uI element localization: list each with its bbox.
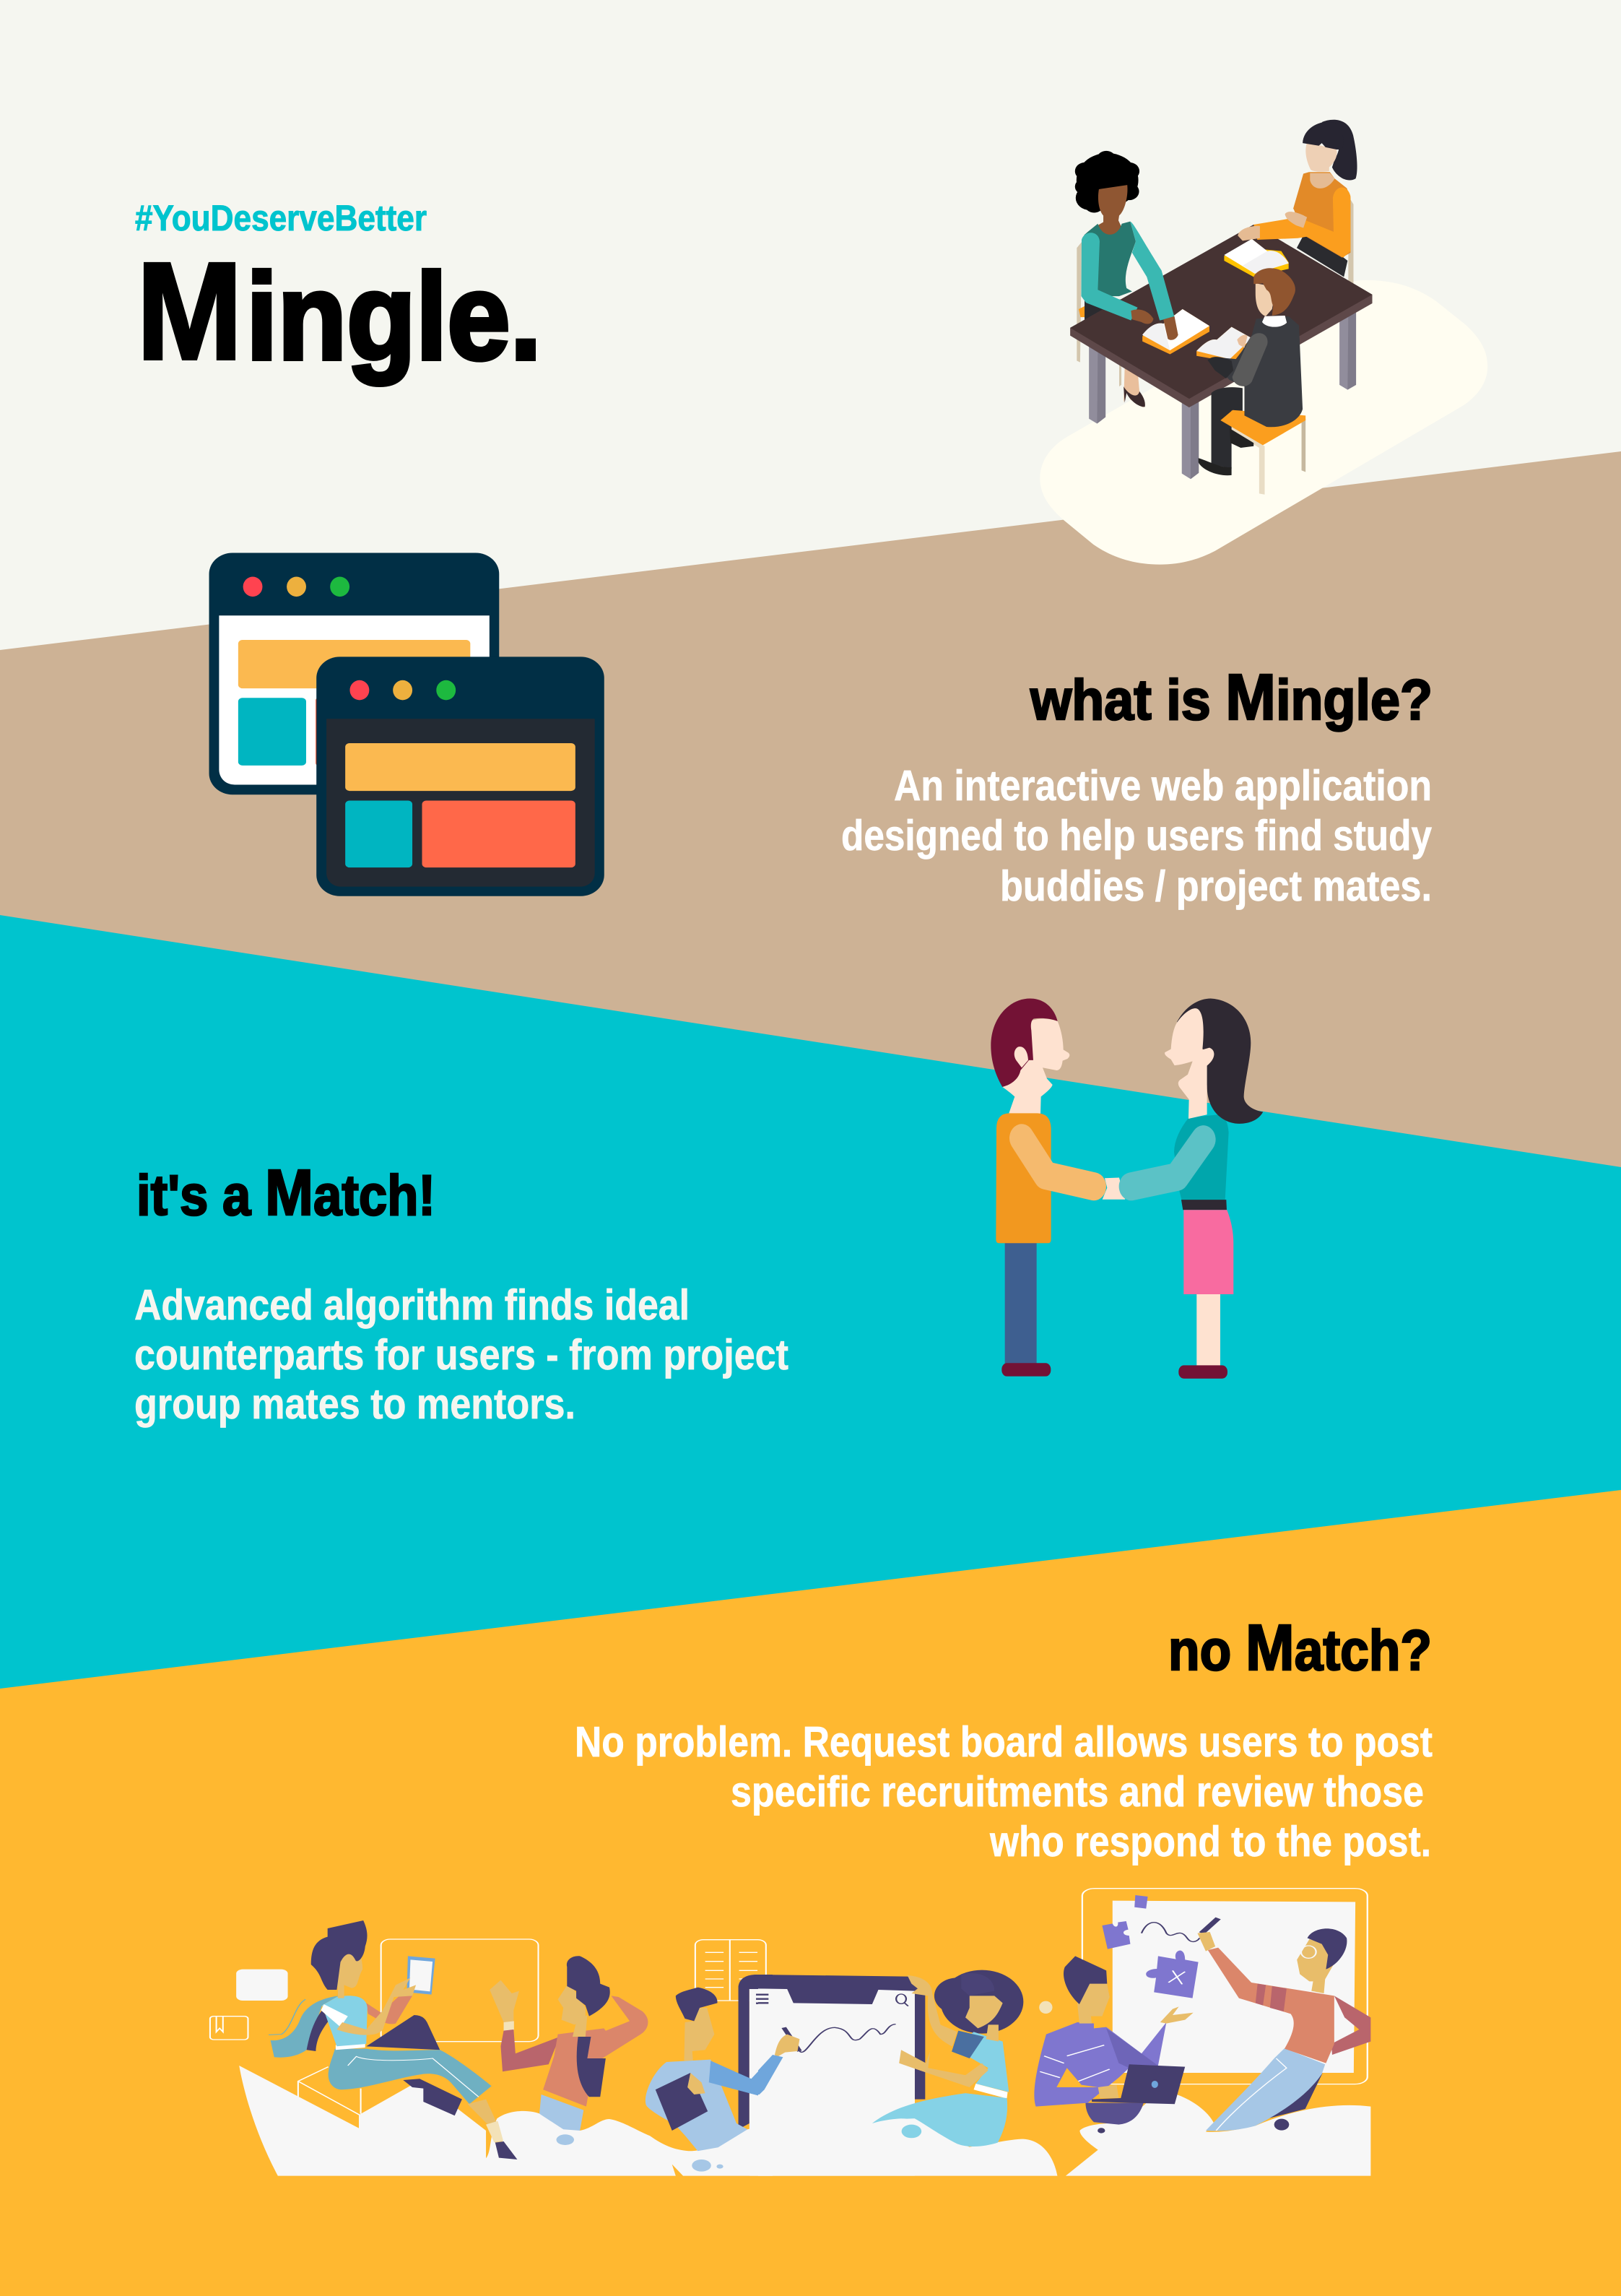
person: woman in blue dress: [872, 1970, 1023, 2146]
puzzle pieces: [1102, 1895, 1199, 1998]
small blue droplets: [557, 2134, 723, 2172]
illustration: two people shaking hands: [991, 999, 1263, 1379]
person: man with backpack: [490, 1956, 648, 2131]
hashtag: #YouDeserveBetter: [135, 198, 427, 238]
text block: no Match: [575, 1718, 1433, 1866]
panel: it's a Match background: [0, 915, 1621, 1733]
back browser window: [209, 553, 499, 794]
text block: it's a Match: counterparts for users - from project: [134, 1331, 788, 1379]
text block: no Match: specific recruitments and review those: [731, 1768, 1424, 1816]
highlight blob: [1040, 280, 1487, 565]
phone with screen: [758, 1975, 925, 2176]
woman: [1131, 999, 1263, 1379]
man: [991, 999, 1094, 1377]
background outlines: [210, 1939, 766, 2128]
panel: no Match background: [0, 1490, 1621, 2296]
droplet on ground: [902, 2125, 921, 2138]
chat bubble: [236, 1970, 288, 2001]
illustration: team collaborating, right half: [758, 1889, 1370, 2176]
text block: what is Mingle: [841, 762, 1432, 910]
white ground: [758, 2094, 1370, 2176]
heading: what is Mingle: what is Mingle?: [1030, 662, 1433, 734]
text block: it's a Match: [134, 1281, 788, 1428]
text block: it's a Match: group mates to mentors.: [134, 1380, 575, 1428]
person: man with tablet: [269, 1920, 517, 2159]
whiteboard squiggle and pen: [1142, 1923, 1199, 1941]
panel: what is Mingle background: [0, 451, 1621, 1228]
text block: what is Mingle: buddies / project mates.: [1000, 862, 1432, 910]
person: man from behind: [1199, 268, 1305, 495]
person: woman with ponytail, body: [1293, 120, 1357, 283]
title: M: [136, 233, 243, 389]
text block: it's a Match: Advanced algorithm finds ideal: [134, 1281, 690, 1329]
heading: no Match: no Match?: [1168, 1612, 1432, 1684]
dress skirt overlap: [872, 2093, 1007, 2146]
illustration: two browser windows: [209, 553, 604, 896]
title: ingle.: [246, 248, 542, 386]
white ground: [239, 2066, 773, 2176]
front browser window: [316, 657, 604, 896]
illustration: three people studying at a table: [1040, 120, 1487, 565]
clasped hands: [1103, 1178, 1125, 1200]
heading: it's a Match: it's a Match!: [136, 1157, 435, 1229]
open books on table: [1142, 239, 1289, 363]
whiteboard: [1082, 1889, 1368, 2084]
puzzle cross: [1168, 1970, 1185, 1984]
table legs: [1089, 345, 1105, 423]
table top: [1070, 225, 1373, 407]
table: [1070, 225, 1373, 479]
person: woman with curly hair, body: [1075, 151, 1145, 407]
text block: no Match: No problem. Request board allows users to post: [575, 1718, 1433, 1766]
person: man with laptop: [1034, 1956, 1194, 2125]
text block: what is Mingle: An interactive web application: [894, 762, 1432, 810]
arms of woman with ponytail: [1238, 187, 1350, 258]
person: man with tablet at the phone: [646, 1975, 773, 2176]
illustration: team collaborating, left half: [210, 1920, 773, 2176]
person: man with glasses drawing on whiteboard: [1098, 1928, 1370, 2133]
text block: no Match: who respond to the post.: [989, 1818, 1431, 1866]
title: [136, 233, 542, 389]
text block: what is Mingle: designed to help users find study: [841, 812, 1432, 859]
arms of woman with curly hair: [1081, 222, 1178, 340]
